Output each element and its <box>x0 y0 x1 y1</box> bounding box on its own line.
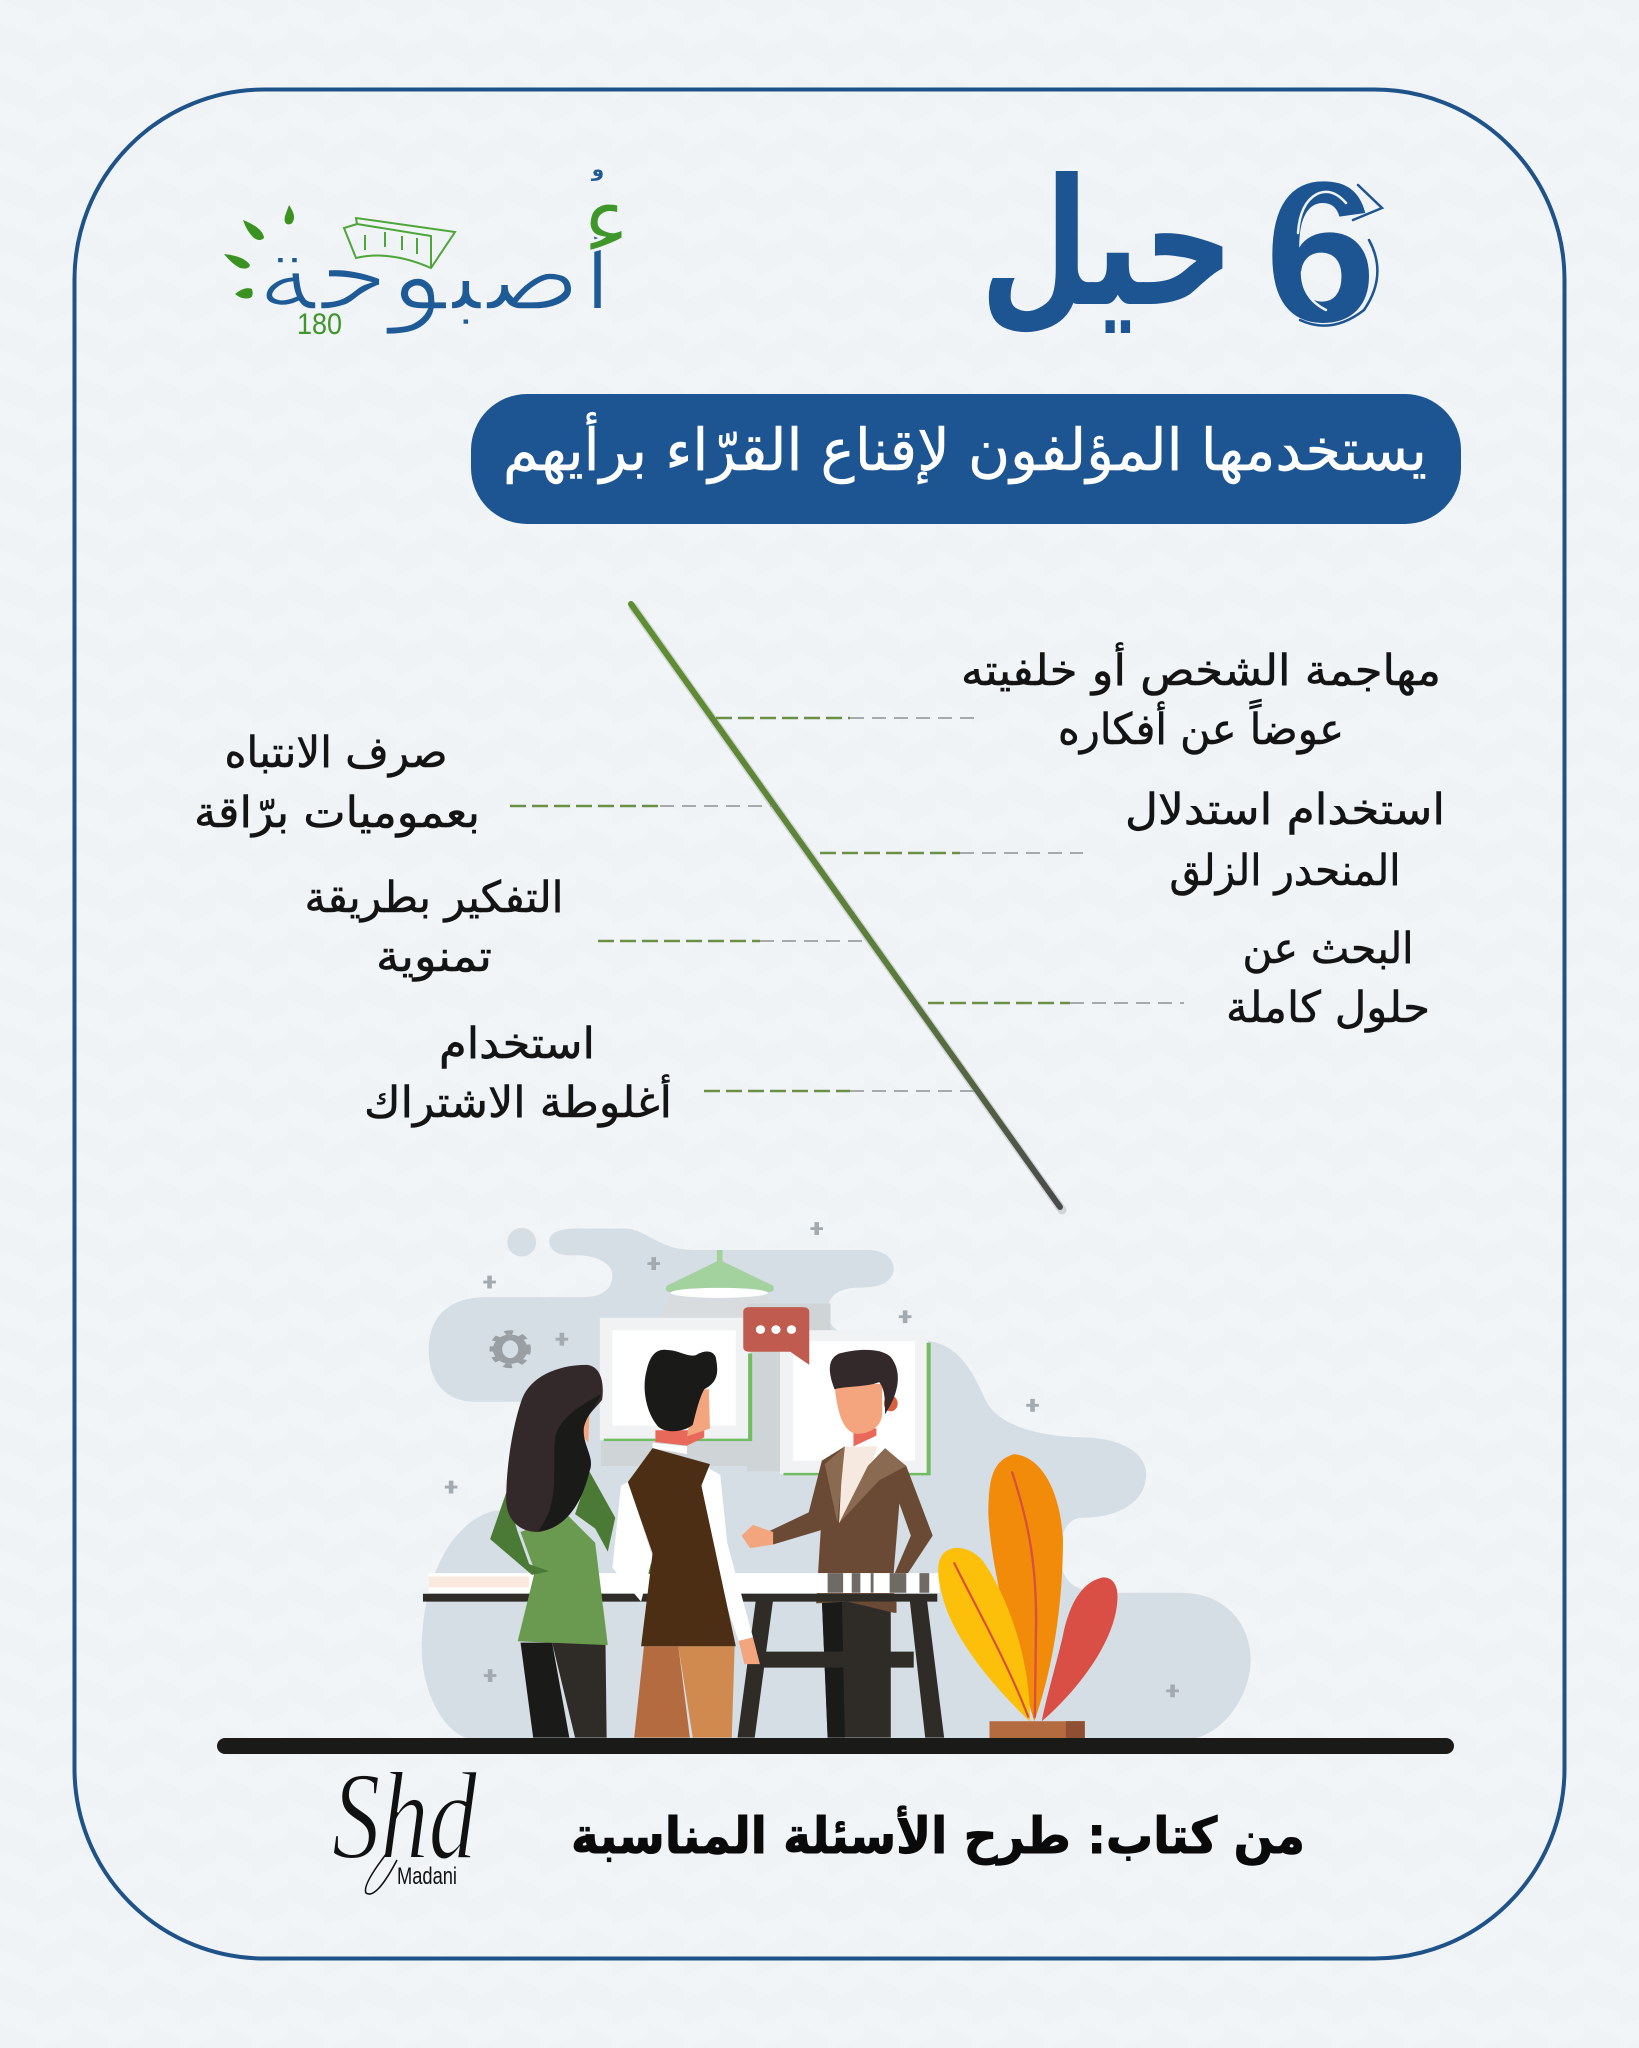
logo book and leaves <box>224 205 455 298</box>
logo: Osbouha 180 <box>224 154 632 341</box>
logo: Osbouha 180: اصبوحة <box>256 213 614 336</box>
item: perfect solutions: البحث عن <box>1242 924 1414 974</box>
sparkle marks <box>445 1222 1179 1697</box>
item: slippery slope: المنحدر الزلق <box>1170 846 1400 896</box>
logo small mark: و <box>591 157 604 181</box>
jacket hem <box>848 1602 897 1613</box>
signature: Shd <box>332 1748 477 1886</box>
subtitle pill <box>471 394 1461 524</box>
item: equivocation fallacy: استخدام <box>439 1019 595 1069</box>
wall boards <box>600 1304 929 1474</box>
man in vest <box>612 1350 760 1738</box>
item: perfect solutions <box>1226 924 1430 1033</box>
item: distraction by generalities: صرف الانتباه <box>224 728 448 778</box>
item: equivocation fallacy <box>364 1019 672 1128</box>
table <box>423 1573 944 1738</box>
diagonal spine line <box>631 604 1062 1210</box>
item: slippery slope <box>1125 785 1445 896</box>
presenter <box>742 1350 933 1738</box>
item: equivocation fallacy: أغلوطة الاشتراك <box>364 1074 672 1128</box>
ground bar <box>217 1738 1454 1754</box>
item: personal attack: مهاجمة الشخص أو خلفيته <box>961 642 1441 696</box>
background blobs <box>422 1228 1251 1739</box>
item: personal attack: عوضاً عن أفكاره <box>1058 699 1344 755</box>
woman in green <box>490 1365 615 1738</box>
item: distraction by generalities: بعموميات برّاقة <box>194 788 480 838</box>
connector dashes <box>510 718 1184 1091</box>
item: slippery slope: استخدام استدلال <box>1125 785 1445 835</box>
ceiling lamp <box>647 1250 796 1350</box>
title: 6 tricks: 6 <box>1265 141 1376 364</box>
item: wishful thinking: التفكير بطريقة <box>304 873 564 923</box>
item: wishful thinking <box>304 873 564 982</box>
gear icon <box>493 1332 527 1366</box>
potted plant <box>938 1454 1118 1738</box>
logo number: 180 <box>297 308 342 341</box>
title: 6 tricks: حيل <box>980 143 1234 346</box>
item: distraction by generalities <box>194 728 480 838</box>
signature: Madani <box>397 1863 457 1890</box>
logo hamza: ء <box>580 154 632 282</box>
illustration: team meeting <box>422 1222 1251 1739</box>
item: perfect solutions: حلول كاملة <box>1226 983 1430 1033</box>
item: wishful thinking: تمنوية <box>376 932 492 982</box>
speech bubble <box>743 1307 809 1365</box>
subtitle pill: يستخدمها المؤلفون لإقناع القرّاء برأيهم <box>503 412 1427 485</box>
item: personal attack <box>961 642 1441 755</box>
book source: من كتاب: طرح الأسئلة المناسبة <box>571 1805 1305 1866</box>
